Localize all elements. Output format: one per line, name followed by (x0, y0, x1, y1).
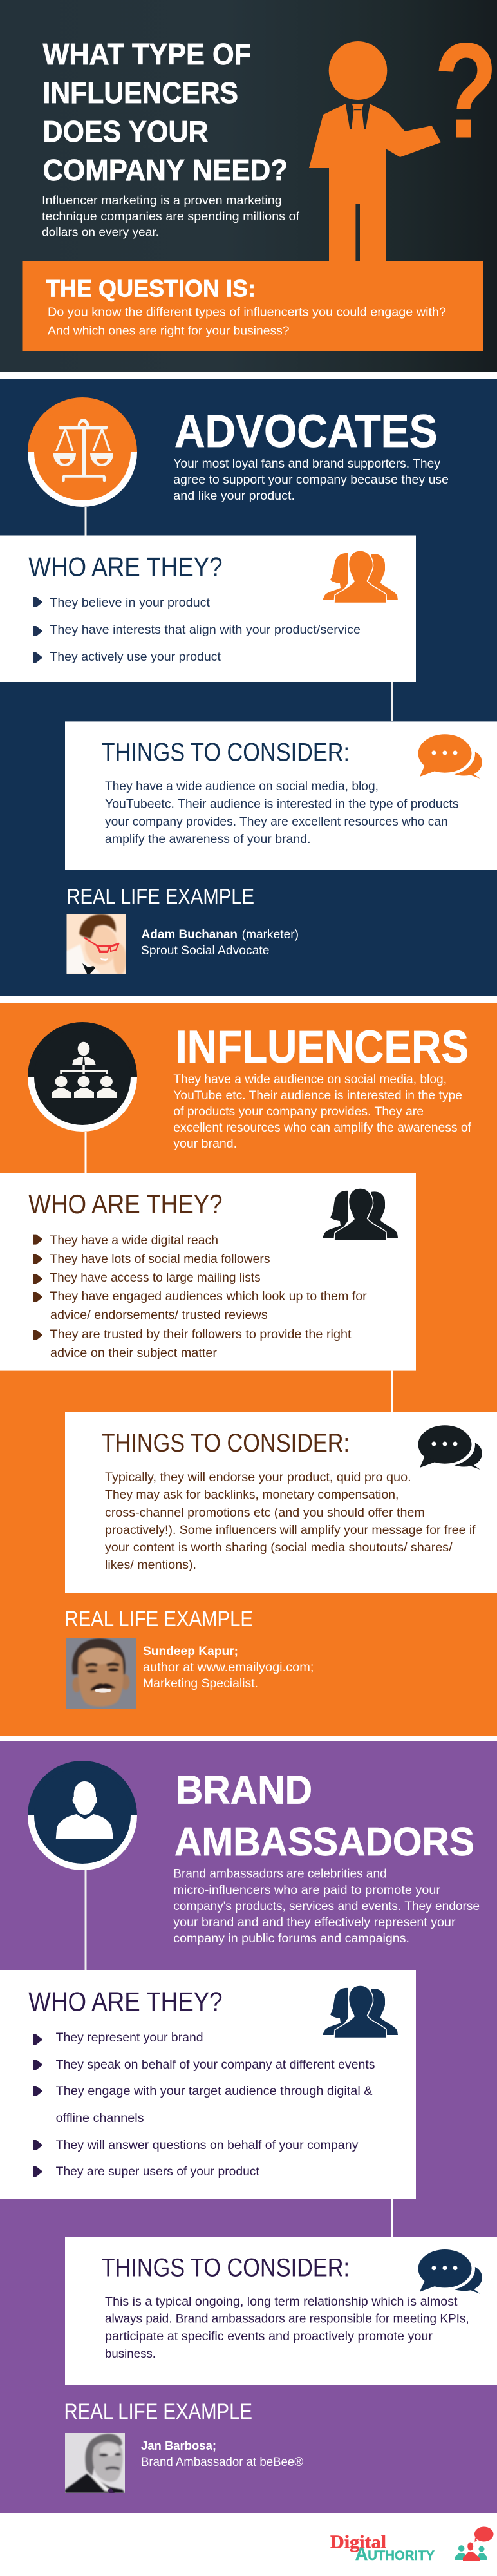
icon: chat bubbles (415, 732, 482, 779)
panel: things to consider (65, 2237, 497, 2385)
icon: people (323, 1188, 398, 1240)
text: your company provides. They are excellent resources who can (105, 815, 448, 829)
description: agree to support your company because they use (173, 473, 449, 487)
text: participate at specific events and proactively promote your (105, 2330, 433, 2344)
intro text: technique companies are spending millions of (42, 209, 300, 223)
caption: Adam Buchanan: Sprout Social Advocate (141, 944, 269, 958)
description (173, 1073, 472, 1151)
connector (85, 1132, 86, 1173)
text: amplify the awareness of your brand. (105, 833, 310, 846)
text: They may ask for backlinks, monetary compensation, (105, 1488, 399, 1502)
text: business. (105, 2347, 156, 2361)
list: They actively use your product (50, 650, 221, 664)
text: cross-channel promotions etc (and you should offer them (105, 1506, 425, 1520)
caption: Sundeep Kapur: Marketing Specialist. (143, 1677, 258, 1690)
icon: people with speech bubble (455, 2527, 493, 2561)
panel: who are they (0, 536, 416, 682)
description: your brand. (173, 1137, 237, 1151)
callout: the question is: THE QUESTION IS: (46, 275, 256, 301)
panel: things to consider (65, 721, 497, 870)
connector (85, 1870, 86, 1970)
heading: real life example: REAL LIFE EXAMPLE (66, 885, 254, 909)
title: WHAT TYPE OF (42, 37, 251, 71)
list (33, 2031, 375, 2179)
title: COMPANY NEED? (42, 153, 288, 187)
description: They have a wide audience on social media, blog, (173, 1073, 447, 1086)
list: They engage with your target audience through digital & (56, 2085, 373, 2098)
connector (391, 1371, 393, 1412)
caption: Adam Buchanan: Adam Buchanan (142, 928, 238, 942)
photo: Sundeep Kapur (66, 1638, 136, 1709)
list: offline channels (56, 2112, 144, 2125)
list: They are trusted by their followers to provide the right (50, 1328, 352, 1341)
list: They have access to large mailing lists (50, 1271, 261, 1285)
description: Brand ambassadors are celebrities and (173, 1868, 387, 1881)
description: company in public forums and campaigns. (173, 1932, 409, 1946)
description: and like your product. (173, 489, 295, 503)
caption: Sundeep Kapur: Sundeep Kapur; (143, 1645, 238, 1658)
logo: Digital Authority: AUTHORITY (355, 2544, 435, 2564)
caption: Adam Buchanan (141, 928, 299, 958)
connector (85, 507, 86, 536)
text (105, 2295, 469, 2361)
caption: Sundeep Kapur (143, 1645, 314, 1690)
icon: chat bubbles (415, 1423, 482, 1470)
icon: org chart badge (28, 1022, 137, 1132)
photo: Adam Buchanan (66, 914, 126, 975)
description: YouTube etc. Their audience is interested in the type (173, 1089, 462, 1103)
text: likes/ mentions). (105, 1558, 196, 1572)
panel: who are they (0, 1970, 416, 2199)
description (173, 1868, 480, 1946)
description: micro-influencers who are paid to promote your (173, 1884, 441, 1897)
connector (391, 2199, 393, 2237)
callout: the question is: And which ones are right for your business? (48, 323, 290, 337)
panel: things to consider: THINGS TO CONSIDER: (102, 738, 350, 766)
description: Your most loyal fans and brand supporters. They (173, 457, 440, 471)
title: INFLUENCERS (42, 76, 238, 109)
caption: Jan Barbosa (141, 2439, 303, 2469)
list: They represent your brand (56, 2031, 203, 2045)
caption: Jan Barbosa: Jan Barbosa; (141, 2439, 216, 2453)
list: They have interests that align with your product/service (50, 623, 361, 637)
logo: Digital Authority (330, 2527, 493, 2564)
icon: people (323, 551, 398, 603)
icon: chat bubbles (415, 2247, 482, 2294)
list (33, 1234, 367, 1360)
text (105, 780, 458, 846)
logo: Digital Authority: Digital (330, 2532, 386, 2553)
list: They have a wide digital reach (50, 1234, 218, 1247)
text (105, 1471, 476, 1572)
icon: scales badge (28, 397, 137, 507)
heading: advocates: ADVOCATES (174, 406, 438, 457)
panel: things to consider (65, 1412, 497, 1593)
text: your content is worth sharing (social media shoutouts/ shares/ (105, 1541, 453, 1555)
description (173, 457, 449, 503)
photo: Jan Barbosa (65, 2433, 125, 2493)
text: YouTubeetc. Their audience is interested in the type of products (105, 798, 458, 811)
text: They have a wide audience on social media, blog, (105, 780, 379, 793)
description: company's products, services and events. They endorse (173, 1900, 480, 1913)
panel: who are they: WHO ARE THEY? (28, 1189, 223, 1219)
intro text: dollars on every year. (42, 225, 159, 239)
connector (391, 682, 393, 721)
panel: who are they: WHO ARE THEY? (28, 552, 223, 582)
list: They speak on behalf of your company at different events (56, 2058, 375, 2072)
text: always paid. Brand ambassadors are responsible for meeting KPIs, (105, 2313, 469, 2326)
panel: things to consider: THINGS TO CONSIDER: (102, 2253, 350, 2282)
panel: who are they: WHO ARE THEY? (28, 1987, 223, 2017)
heading: brand ambassadors: BRAND (176, 1768, 312, 1813)
icon: ambassador badge (28, 1761, 137, 1870)
description: excellent resources who can amplify the awareness of (173, 1121, 472, 1135)
heading: real life example: REAL LIFE EXAMPLE (64, 1607, 253, 1631)
list: They have engaged audiences which look up to them for (50, 1290, 367, 1303)
caption: Sundeep Kapur: author at www.emailyogi.com; (143, 1661, 314, 1674)
panel: advocates (0, 379, 497, 996)
icon: businessman (309, 41, 441, 261)
list: advice on their subject matter (50, 1347, 218, 1360)
heading: brand ambassadors (174, 1768, 474, 1864)
panel: who are they (0, 1173, 416, 1371)
panel: brand ambassadors (0, 1741, 497, 2513)
caption: Adam Buchanan: (marketer) (242, 928, 299, 942)
list: advice/ endorsements/ trusted reviews (50, 1309, 268, 1322)
list: They will answer questions on behalf of your company (56, 2139, 359, 2152)
callout: the question is: Do you know the different types of influencerts you could engage with? (48, 305, 446, 319)
list: They have lots of social media followers (50, 1253, 270, 1266)
heading: brand ambassadors: AMBASSADORS (174, 1820, 474, 1864)
hero panel (0, 0, 497, 372)
panel: influencers (0, 1003, 497, 1736)
description: of products your company provides. They are (173, 1105, 424, 1119)
icon: question mark: ? (434, 15, 497, 166)
description: your brand and and they effectively represent your (173, 1916, 456, 1929)
title: DOES YOUR (42, 115, 209, 148)
panel: things to consider: THINGS TO CONSIDER: (102, 1429, 350, 1457)
text: Typically, they will endorse your product, quid pro quo. (105, 1471, 411, 1484)
heading: real life example: REAL LIFE EXAMPLE (64, 2400, 252, 2424)
list (33, 596, 361, 664)
caption: Jan Barbosa: Brand Ambassador at beBee® (141, 2456, 303, 2469)
intro text (42, 193, 300, 239)
callout: the question is (22, 261, 483, 351)
list: They are super users of your product (56, 2165, 260, 2179)
heading: influencers: INFLUENCERS (176, 1022, 469, 1073)
text: This is a typical ongoing, long term relationship which is almost (105, 2295, 458, 2309)
list: They believe in your product (50, 596, 211, 610)
intro text: Influencer marketing is a proven marketing (42, 193, 282, 207)
icon: people (323, 1985, 398, 2038)
text: proactively!). Some influencers will amplify your message for free if (105, 1524, 476, 1537)
title (42, 37, 288, 187)
